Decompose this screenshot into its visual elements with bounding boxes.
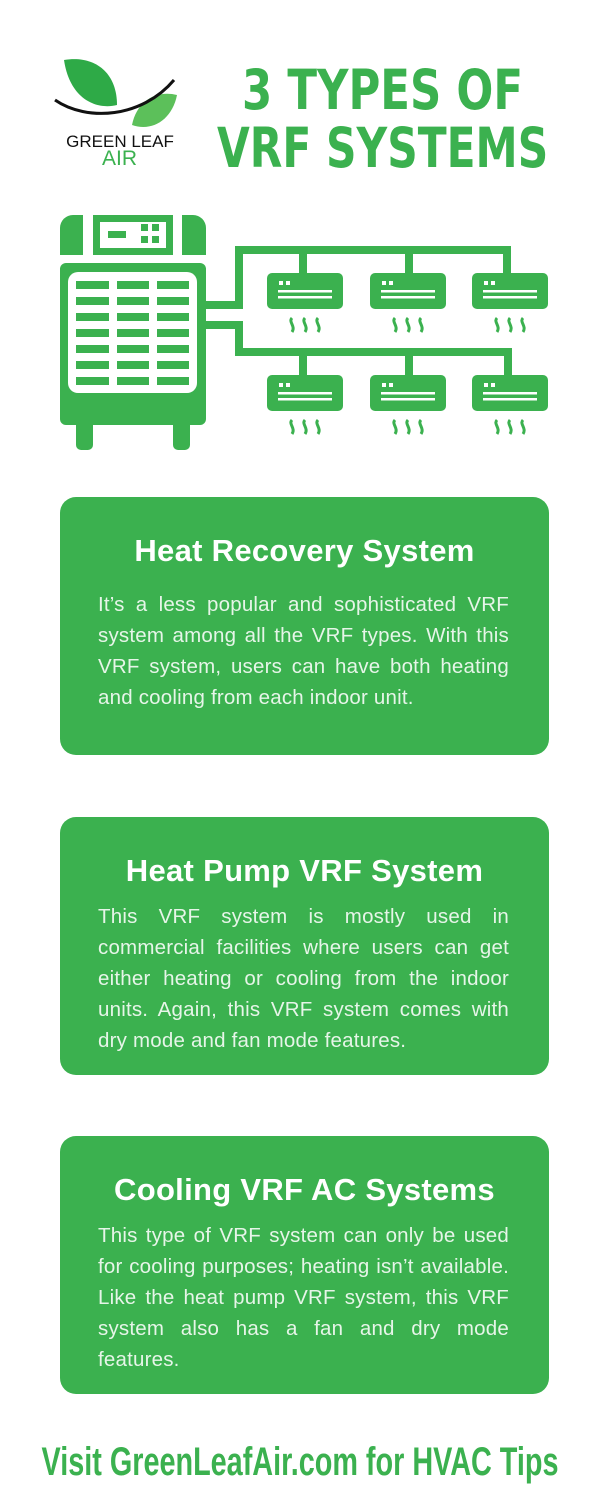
heading: Cooling VRF AC Systems <box>114 1172 495 1207</box>
pipes <box>206 250 508 378</box>
panel: heat pump <box>60 817 549 1075</box>
title: VRF SYSTEMS <box>217 116 548 180</box>
panel: heat recovery <box>60 497 549 755</box>
title <box>217 58 548 180</box>
title: 3 TYPES OF <box>242 58 523 122</box>
logo: AIR <box>102 147 137 170</box>
icon: VRF system diagram <box>60 215 548 450</box>
indoor units <box>267 273 343 332</box>
text block: This VRF system is mostly used in commercial facilities where users can get either heating or cooling from the indoor units. Again, this VRF system comes with dry mode and fan mode features. <box>98 905 509 1052</box>
icon: leaves <box>55 59 177 127</box>
outdoor unit <box>60 215 206 450</box>
heading: Heat Recovery System <box>134 533 475 568</box>
logo <box>54 59 177 170</box>
logo text: GREEN LEAF <box>66 132 174 151</box>
text block: It’s a less popular and sophisticated VRF system among all the VRF types. With this VRF system, users can have both heating and cooling from each indoor unit. <box>98 593 509 709</box>
text block: This type of VRF system can only be used for cooling purposes; heating isn’t available. Like the heat pump VRF system, this VRF system also has a fan and dry mode features. <box>98 1224 509 1371</box>
heading: Heat Pump VRF System <box>126 853 483 888</box>
footer: Visit GreenLeafAir.com for HVAC Tips <box>42 1440 558 1484</box>
panel: cooling <box>60 1136 549 1394</box>
